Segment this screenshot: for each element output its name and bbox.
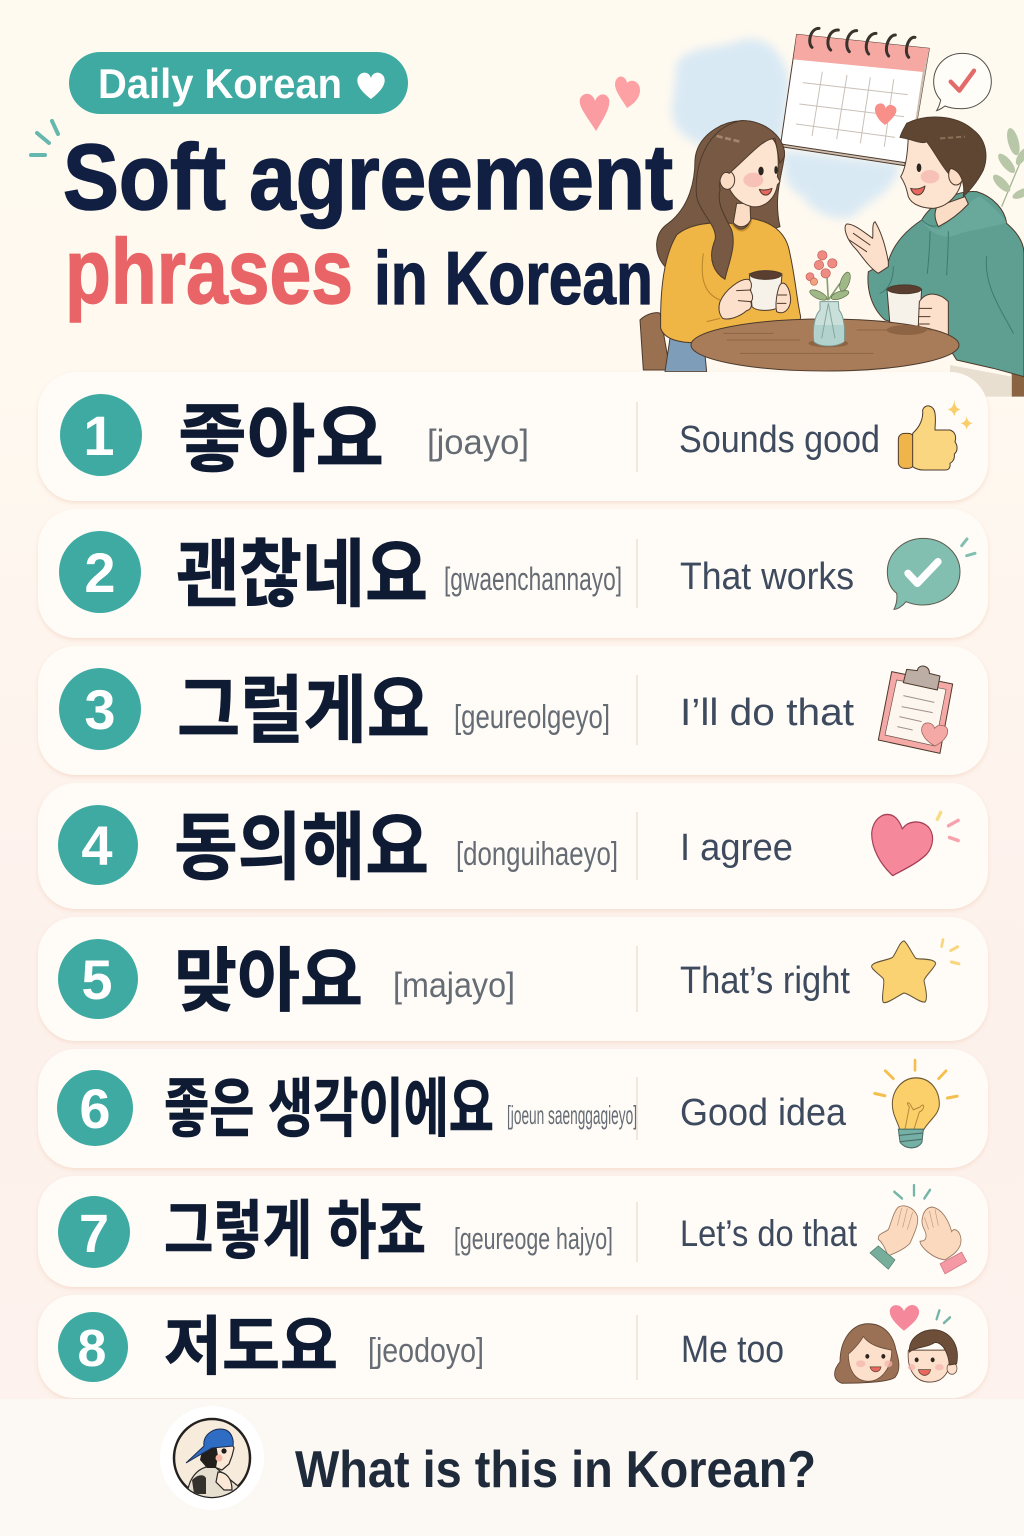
icon: heart [872,813,958,876]
sweater [661,218,801,343]
title [63,125,673,323]
card 3: 3 [84,678,116,741]
top and front hair [696,121,785,279]
chair [640,313,670,370]
mug [749,271,782,310]
back hair [657,121,785,280]
card 1 [38,372,988,501]
footer question: What is this in Korean? [295,1441,816,1499]
card 1: Sounds good [679,419,880,461]
card 4 [38,783,988,909]
card 6: Good idea [680,1092,847,1134]
face [726,137,780,207]
decorative sparkle lines [31,121,58,155]
speech bubble with check [934,53,991,111]
card 2 [38,509,988,638]
left hand [719,279,753,319]
card 6: 6 [79,1077,111,1140]
card 7: [geureoge hajyo] [454,1221,613,1256]
badge: Daily Korean [69,52,408,114]
card 4: 4 [81,814,113,877]
footer band [52,1399,974,1510]
card 5: That’s right [680,960,850,1002]
card 1: [joayo] [427,423,529,462]
raised hand [845,222,888,273]
icon: high five hands [870,1185,967,1274]
card 5: 맞아요 [174,942,363,1020]
holding hand [918,294,948,335]
face [901,135,962,208]
hoodie [868,191,1024,377]
woman [657,121,801,343]
card 6 [38,1049,988,1168]
title: phrases [65,221,353,323]
card 8 [38,1295,988,1398]
card 2: 2 [84,541,116,604]
card 8: 8 [78,1320,106,1378]
neck [935,197,968,227]
card 3 [38,646,988,775]
man [845,117,1024,397]
card 6: 좋은 생각이에요 [164,1073,494,1145]
card 7: Let’s do that [680,1213,858,1254]
card 4: 동의해요 [174,806,429,889]
calendar [781,28,929,166]
card 4: I agree [680,827,793,869]
title: Soft agreement [63,125,673,229]
card 1: 1 [83,404,115,467]
right hand [776,283,791,313]
decorative pink hearts [580,76,640,131]
card 8: [jeodoyo] [368,1332,484,1370]
table [691,319,959,371]
card 7 [38,1176,988,1287]
flowers and vase [806,251,852,346]
icon: thumbs up [898,400,973,470]
badge: Daily Korean: Daily Korean [98,60,342,107]
illustration: friends at a cafe table with a calendar [640,28,1024,397]
icon: check speech bubble [887,538,975,609]
avatar: boy with blue cap [160,1406,264,1510]
card 3: 그럴게요 [177,669,430,752]
card 2: 괜찮네요 [176,533,428,616]
card 3: I’ll do that [680,692,854,734]
card 5: 5 [81,948,113,1011]
icon: light bulb [875,1060,957,1148]
card 4: [donguihaeyo] [456,835,618,872]
jeans [665,338,707,372]
card 1: 좋아요 [178,398,384,481]
chair back and trousers [1012,353,1024,397]
card 7: 그렇게 하죠 [164,1195,426,1267]
icon: star [872,940,959,1003]
card 5 [38,917,988,1041]
card 5: [majayo] [393,966,515,1005]
watercolor cloud [672,39,900,218]
icon: clipboard with heart [878,666,953,753]
icon: two smiling friends [835,1305,957,1383]
card 6: [joeun saenggagieyo] [507,1100,637,1130]
card 3: [geureolgeyo] [454,698,610,735]
card 8: Me too [681,1329,784,1371]
mug [887,285,922,329]
card 8: 저도요 [164,1311,338,1383]
title: in Korean [374,236,653,320]
card 2: That works [680,556,854,598]
plant leaves [990,127,1024,207]
card 7: 7 [79,1204,109,1264]
hair [900,117,986,197]
neck [733,203,751,227]
icon: heart in badge [357,73,385,99]
card 2: [gwaenchannayo] [444,561,622,597]
